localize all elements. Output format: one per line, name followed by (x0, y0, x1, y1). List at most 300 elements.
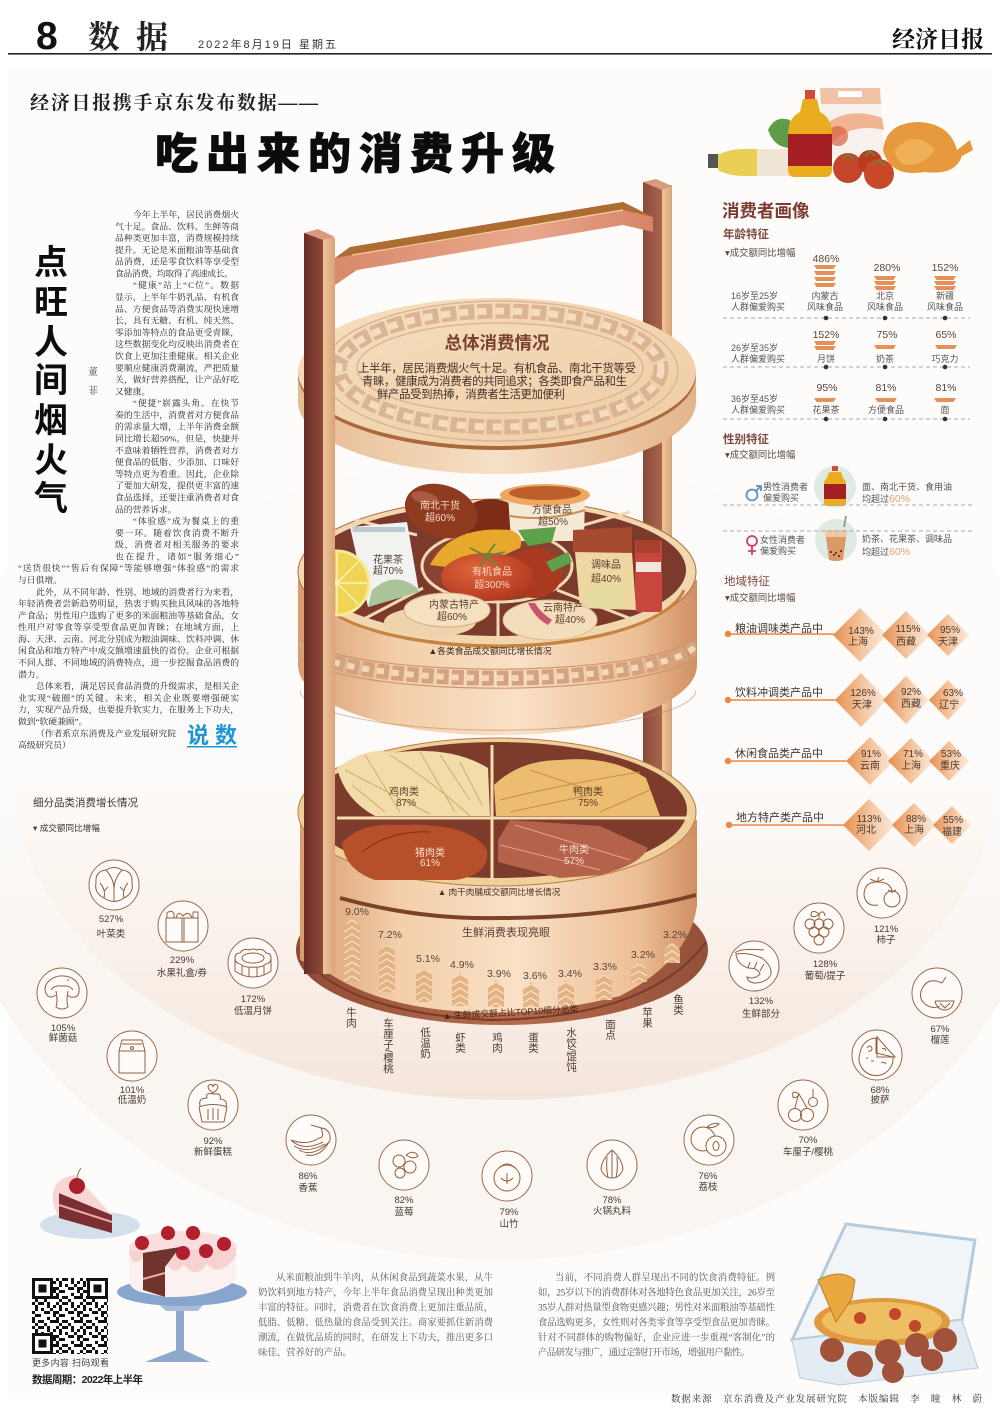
region row 2: 126% (850, 688, 876, 699)
article body text: 关，做好营养搭配，让产品好吃 (115, 374, 239, 386)
newspaper masthead (8, 15, 992, 58)
bottom text column 2: 如，25岁以下的消费群体对各地特色食品更加关注，26岁至 (538, 1286, 775, 1298)
age heading: 年龄特征 (723, 227, 769, 241)
label: leafy greens (97, 914, 126, 940)
label: mangosteen (499, 1207, 519, 1230)
middle tier food labels: 超60% (425, 511, 455, 524)
bar: shrimp 4.9% (452, 972, 468, 1006)
label: blueberry: 82% (394, 1195, 414, 1206)
label: mushroom (49, 1023, 77, 1044)
icon: cupcake (188, 1080, 238, 1130)
newspaper logo: 经济日报 (892, 27, 984, 52)
label: lychee (698, 1171, 718, 1193)
fresh food heading: 生鲜消费表现亮眼 (462, 925, 550, 939)
author byline: 董 (88, 366, 98, 378)
bar: fish 3.2% (664, 942, 680, 963)
left column vertical heading: 旺 (34, 284, 68, 322)
region row 4 (726, 799, 971, 851)
label: persimmon: 121% (874, 924, 899, 935)
region row 4: 河北 (856, 824, 876, 836)
region row 1: 粮油调味类产品中 (735, 621, 823, 635)
icon: mooncake (228, 938, 278, 988)
age row 1: 486% (813, 253, 839, 265)
vertical category labels under the bars: 鸡肉 (491, 1031, 503, 1053)
main title: 吃出来的消费升级 (155, 131, 555, 179)
left column vertical heading: 气 (34, 480, 68, 518)
food: dried goods (398, 475, 521, 547)
label: grapes: 葡萄/提子 (805, 970, 846, 982)
section name: 数据 (88, 19, 168, 55)
small oil bottle (708, 149, 790, 176)
region row 1: 115% (896, 624, 921, 635)
label: milk: 101% (120, 1085, 145, 1096)
region row 3: 53% (941, 749, 961, 760)
region row 3: 91% (861, 749, 881, 760)
age row 1: 风味食品 (867, 301, 903, 312)
food: flower tea and lemon (305, 522, 419, 615)
bar value labels: 3.2% (663, 929, 687, 941)
age row 2: 月饼 (817, 353, 835, 364)
masthead rule (8, 53, 992, 55)
male row (723, 466, 972, 508)
article body text: 业实现“破圈”的关键。未来，相关企业既要增强硬实 (18, 692, 239, 704)
article body text: 品种类更加丰富，消费规模持续 (115, 232, 239, 244)
article body text (18, 208, 239, 750)
label: durian (930, 1024, 950, 1046)
vertical category labels under the bars: 蛋类 (527, 1032, 539, 1054)
bar: eggs 3.6% (523, 982, 539, 1007)
bottom text column 1: 味佳、营养好的产品。 (258, 1346, 352, 1358)
gender legend: ▾成交额同比增幅 (725, 449, 795, 460)
icon: lychee (684, 1115, 734, 1165)
age row 3: 人群偏爱购买 (731, 404, 785, 415)
label: persimmon: 柿子 (876, 934, 896, 946)
region row 1: 143% (848, 626, 874, 637)
article body text: 食品消费，均取得了高速成长。 (115, 268, 233, 280)
middle tier rim (298, 499, 696, 646)
subcategory icon ring (37, 860, 962, 1230)
age row 3: 面 (940, 405, 950, 415)
bar value labels: 5.1% (416, 953, 440, 965)
label: fruit gift box (157, 955, 208, 979)
age row 2: 152% (813, 329, 839, 341)
region row 3: 重庆 (940, 759, 960, 772)
bottom tier food labels: 猪肉类 (415, 846, 445, 859)
lid text: 鲜产品受到热捧，消费者生活更加便利 (377, 387, 565, 401)
middle tier food labels: 超300% (474, 578, 510, 591)
bottom text column 1: 丰富的特征。同时，消费者在饮食消费上更加注重品质， (258, 1302, 493, 1314)
article body text: 便食品的低脂、少添加、口味好 (115, 456, 239, 467)
icon: persimmon (857, 868, 907, 918)
region row 2: 92% (901, 687, 921, 698)
pizza slice (818, 1274, 855, 1322)
region row 1: 天津 (938, 636, 958, 648)
left post (304, 229, 335, 974)
article body text: 要一环。随着饮食消费不断升 (115, 527, 239, 538)
middle tier food labels: 云南特产 (543, 601, 583, 614)
label: cherries: 70% (798, 1135, 818, 1146)
left column vertical heading: 间 (34, 362, 68, 400)
age row 3: 36岁至45岁 (731, 393, 778, 404)
bottom tier side with fresh food bars (300, 820, 697, 1013)
bar: beef 9.0% (344, 918, 360, 982)
article body text: 显示，上半年牛奶乳品、有机食 (115, 291, 239, 303)
bar: dumplings 3.4% (558, 980, 574, 1005)
label: hotpot balls: 78% (602, 1195, 622, 1206)
bottom tier food labels: 牛肉类 (559, 843, 589, 856)
illustration: cherry cake on stand (117, 1226, 247, 1362)
lid text: 上半年，居民消费烟火气十足。有机食品、南北干货等受 (358, 361, 636, 375)
age row 3: 95% (816, 382, 838, 394)
bar: cherries 7.2% (379, 943, 395, 992)
label: grapes: 128% (813, 959, 838, 970)
icon: banana (286, 1115, 336, 1165)
region row 3: 休闲食品类产品中 (735, 746, 823, 760)
article body text: 性用户对零食等享受型食品更加青睐；在地域方面，上 (18, 621, 239, 633)
article body text: 今年上半年，居民消费烟火 (133, 208, 239, 220)
bar value labels: 3.9% (487, 968, 511, 980)
bottom text column 1: 奶饮料到地方特产，今年上半年食品消费呈现出种类更加 (258, 1286, 493, 1298)
region row 1: 95% (940, 625, 960, 636)
article body text: 奏的生活中，消费者对方便食品 (115, 409, 239, 421)
region row 2: 63% (943, 688, 963, 699)
left column vertical heading (34, 244, 68, 518)
age row 3: 81% (875, 382, 897, 394)
top lid (298, 298, 696, 474)
left column vertical heading: 点 (34, 244, 68, 282)
label: shrimp: 生鲜部分 (742, 1008, 780, 1020)
article body text: （作者系京东消费及产业发展研究院 (36, 727, 176, 738)
vertical category labels under the bars: 低温奶 (419, 1026, 431, 1059)
vertical category labels under the bars: 牛肉 (345, 1006, 357, 1028)
article body text: 此外，从不同年龄、性别、地域的消费者行为来看， (36, 586, 239, 598)
article body text: 饮食上更加注重健康。相关企业 (115, 350, 239, 361)
caption: food categories: ▲各类食品成交额同比增长情况 (428, 645, 552, 656)
shuoshu label: 说数 (187, 723, 237, 748)
age row 1: 16岁至25岁 (731, 290, 778, 301)
label: cherries: 车厘子/樱桃 (783, 1146, 834, 1158)
label: milk (118, 1085, 146, 1106)
label: lychee: 76% (698, 1171, 718, 1182)
label: mooncake (234, 994, 272, 1017)
label: shrimp: 132% (749, 996, 774, 1007)
icon: pizza (852, 1030, 902, 1080)
article body text: “体验感”成为餐桌上的重 (133, 515, 239, 526)
bottom text column 2: 产品研发与推广，通过定制打开市场，增强用户黏性。 (538, 1346, 750, 1358)
label: cherries (783, 1135, 834, 1158)
illustration: cake slice (40, 1168, 140, 1239)
box lid (792, 1224, 975, 1340)
illustration: pizza box and meatballs (792, 1224, 978, 1385)
subcategory legend: ▾ 成交额同比增幅 (33, 822, 100, 833)
article body text: 气十足。食品、饮料、生鲜等商 (115, 220, 239, 231)
date: 2022年8月19日 星期五 (198, 37, 336, 51)
label: mushroom: 105% (51, 1023, 76, 1034)
region row 1: 上海 (848, 635, 868, 648)
author byline: 菲 (88, 385, 98, 397)
icon: mushroom (37, 968, 87, 1018)
data period: 数据周期：2022年上半年 (32, 1373, 144, 1386)
icon: milk carton (107, 1031, 157, 1081)
label: mooncake: 172% (241, 994, 266, 1005)
caption: jerky: ▲ 肉干肉脯成交额同比增长情况 (438, 886, 561, 897)
vertical category labels under the bars: 车厘子/樱桃 (382, 1017, 394, 1074)
bottom text column 1: 从米面粮油到牛羊肉，从休闲食品到蔬菜水果，从牛 (276, 1272, 493, 1284)
age legend: ▾成交额同比增幅 (725, 247, 795, 258)
label: blueberry (394, 1195, 414, 1218)
region legend: ▾成交额同比增幅 (725, 592, 795, 603)
male row: 男性消费者 (763, 481, 808, 492)
article body text: 品消费，还是零食饮料等享受型 (115, 256, 239, 268)
label: cake: 新鲜蛋糕 (194, 1146, 232, 1158)
female row: 偏爱购买 (760, 545, 796, 556)
bar: chicken 3.9% (488, 980, 504, 1007)
male row: 均超过60% (862, 493, 910, 505)
article body text: 海、天津、云南、河北分别成为粮油调味、饮料冲调、休 (18, 633, 239, 644)
food: Yunnan specialty (503, 600, 597, 640)
bottom text column 1: 低脂、低糖、低热量的食品受到关注。商家要抓住新消费 (258, 1316, 494, 1328)
label: mangosteen: 山竹 (499, 1218, 519, 1230)
vertical category labels under the bars: 鱼类 (672, 993, 684, 1016)
middle tier side (296, 580, 698, 735)
age row 1 (723, 253, 970, 320)
region row 2 (725, 673, 967, 727)
region row 2: 饮料冲调类产品中 (735, 685, 823, 699)
article body text: 闲食品和地方特产中成交额增速最快的省份。企业可根据 (18, 645, 239, 656)
icon: cherries (778, 1080, 828, 1130)
article body text: “送货很快”“售后有保障”等能够增强“体验感”的需求 (18, 562, 239, 573)
food: seasoning jar and bottle (573, 527, 662, 612)
label: banana (298, 1171, 318, 1194)
region row 4: 113% (857, 814, 882, 825)
bar value labels (345, 906, 687, 982)
page number: 8 (36, 15, 58, 58)
region row 3: 上海 (901, 759, 921, 772)
region row 2: 天津 (852, 699, 872, 711)
chicken jerky (337, 751, 490, 816)
age row 3 (723, 382, 970, 421)
article body text: 高级研究员） (18, 739, 71, 750)
region row 3: 71% (903, 749, 923, 760)
article body text: 总体来看，满足居民食品消费的升级需求，是相关企 (36, 680, 239, 692)
left column vertical heading: 火 (34, 442, 68, 480)
label: shrimp (742, 996, 780, 1020)
left column vertical heading: 烟 (34, 402, 68, 440)
middle tier food labels: 超50% (538, 515, 568, 528)
right post (643, 179, 672, 962)
bottom tier food labels: 57% (564, 856, 584, 867)
icon: grapes (794, 903, 844, 953)
article body text: 又健康。 (115, 385, 150, 396)
rice bag (820, 88, 884, 158)
article body text: 级，消费者对相关服务的要求 (115, 539, 239, 551)
food: organic vegetables (430, 529, 572, 601)
vertical category labels under the bars (345, 993, 684, 1074)
age row 3: 花果茶 (812, 404, 840, 415)
bottom tier food labels (389, 785, 603, 869)
lid text: 青睐，健康成为消费者的共同追求；各类即食产品和生 (362, 374, 627, 388)
label: persimmon (874, 924, 899, 946)
article body text: “健康”站上“C位”。数据 (133, 279, 239, 290)
food: instant cup (500, 484, 590, 546)
middle tier food labels: 超70% (373, 564, 403, 577)
bottom tier meats (337, 751, 660, 880)
tomatoes (833, 150, 894, 189)
article body text: 的需求量大增，上半年消费金额 (115, 421, 239, 433)
bottom tier food labels: 75% (578, 798, 598, 809)
footer credits: 数据来源 京东消费及产业发展研究院 本版编辑 李 瞳 林 蔚 (671, 1393, 982, 1405)
middle tier food labels: 有机食品 (472, 565, 512, 578)
gender heading: 性别特征 (723, 432, 769, 446)
region row 1: 西藏 (896, 636, 916, 648)
middle tier food labels (373, 499, 621, 626)
steamer illustration (296, 179, 708, 1025)
article body text: 品、方便食品等消费实现快速增 (115, 303, 239, 314)
portrait heading: 消费者画像 (722, 201, 810, 221)
region row 4: 55% (943, 815, 963, 826)
age row 2: 人群偏爱购买 (731, 353, 785, 364)
icon: mangosteen (482, 1151, 532, 1201)
female row: 女性消费者 (760, 534, 805, 545)
label: fruit gift box: 水果礼盒/券 (157, 967, 208, 979)
food: Inner Mongolia specialty (384, 593, 490, 637)
bottom text column 2: 35岁人群对热量型食物更感兴趣；男性对米面粮油等基础性 (538, 1302, 776, 1314)
bar: apple 3.2% (631, 962, 647, 982)
label: fruit gift box: 229% (170, 955, 195, 966)
meatballs (820, 1328, 957, 1383)
article body text: 这些数据变化均反映出消费者在 (115, 338, 239, 349)
region row 3: 云南 (860, 759, 880, 772)
region row 4: 88% (906, 814, 926, 825)
bottom tier rim (298, 738, 696, 886)
middle tier food labels: 花果茶 (373, 553, 403, 566)
article body text: “便捷”崭露头角。在快节 (133, 397, 239, 408)
article body text: 提升。无论是米面粮油等基础食 (115, 244, 239, 255)
bar value labels: 7.2% (378, 929, 402, 941)
label: durian: 榴莲 (930, 1034, 950, 1046)
label: cake: 92% (203, 1136, 223, 1147)
article body text: 不意味着牺牲营养，消费者对方 (115, 444, 239, 456)
article body text: 年轻消费者尝新趋势明显，热衷于购买独具风味的各地特 (18, 598, 239, 610)
age row 1: 152% (932, 262, 958, 274)
label: leafy greens: 527% (99, 914, 124, 925)
region row 3 (725, 737, 969, 785)
age row 1: 内蒙古 (811, 290, 839, 301)
age row 2: 75% (876, 329, 898, 341)
region row 2: 辽宁 (939, 698, 959, 711)
label: pizza (870, 1085, 890, 1106)
QR caption: 更多内容 扫码观看 (32, 1357, 109, 1368)
bar: pastry 3.3% (596, 973, 612, 1000)
base tray (296, 875, 708, 1025)
article body text: 等特点更为看重。因此，企业除 (115, 468, 239, 480)
author byline (88, 366, 98, 397)
article body text: 长，具有无糖、有机、纯天然、 (115, 315, 239, 327)
top handle (335, 202, 653, 285)
QR code (32, 1278, 108, 1354)
bottom text column 2 (538, 1272, 776, 1358)
middle tier food labels: 方便食品 (532, 503, 572, 516)
region row 4: 上海 (904, 823, 924, 836)
subcategory heading: 细分品类消费增长情况 (33, 796, 138, 809)
age row 3: 81% (935, 382, 957, 394)
label: pizza: 披萨 (870, 1094, 890, 1106)
article body text: 力，实现产品升级，也要提升软实力，在服务上下功夫， (18, 704, 239, 716)
panel: consumer portrait (722, 201, 972, 851)
label: leafy greens: 叶菜类 (97, 928, 126, 940)
caption: fresh top10: ▲ 生鲜成交额占比TOP10细分品类 (443, 1003, 579, 1021)
age row 1: 风味食品 (807, 301, 843, 312)
label: grapes (805, 959, 846, 982)
icon: shrimp (729, 941, 779, 991)
region row 1 (725, 608, 969, 662)
age row 1: 人群偏爱购买 (731, 301, 785, 312)
label: mushroom: 鲜菌菇 (49, 1032, 77, 1044)
lid heading: 总体消费情况 (444, 333, 550, 353)
icon: hotpot balls (587, 1140, 637, 1190)
left column vertical heading: 人 (34, 324, 68, 362)
label: mangosteen: 79% (499, 1207, 519, 1218)
bottom tier food labels: 87% (396, 798, 416, 809)
lid text (358, 361, 636, 401)
male row: 偏爱购买 (763, 492, 799, 503)
label: banana: 86% (298, 1171, 318, 1182)
label: hotpot balls: 火锅丸料 (593, 1205, 631, 1217)
article body text: 也在提升，诸如“服务细心” (115, 550, 239, 562)
middle tier food labels: 南北干货 (420, 499, 460, 512)
label: cake (194, 1136, 232, 1158)
age row 1: 新疆 (936, 290, 954, 301)
subtitle: 经济日报携手京东发布数据—— (30, 91, 319, 114)
box base (792, 1320, 978, 1385)
vertical category labels under the bars: 水饺/馄饨 (565, 1027, 577, 1072)
bar value labels: 3.6% (523, 970, 547, 982)
icon: blueberry (379, 1140, 429, 1190)
article body text: 零添加等特点的食品更受青睐， (115, 326, 239, 338)
middle tier food labels: 超40% (591, 572, 621, 585)
label: banana: 香蕉 (298, 1182, 318, 1194)
green vegetables (768, 119, 795, 148)
big oil bottle (788, 90, 832, 177)
article body text: 同比增长超50%。但是，快捷并 (115, 432, 239, 444)
bottom tier food labels: 61% (420, 858, 440, 869)
article body text: 产食品；男性用户选购了更多的米面粮油等基础食品，女 (18, 609, 239, 621)
vertical category labels under the bars: 虾类 (454, 1031, 466, 1054)
bar: milk 5.1% (416, 967, 432, 1002)
outer arc background (0, 320, 1000, 1260)
article body text: 了要加大研发，提供更丰富的速 (115, 480, 239, 492)
bar value labels: 3.4% (558, 968, 582, 980)
middle tier food labels: 超40% (555, 613, 585, 626)
age row 2: 巧克力 (931, 353, 959, 364)
bottom tier dividers (337, 745, 690, 880)
bottom text column 2: 针对不同群体的购物偏好，企业应进一步重视“客制化”的 (538, 1332, 775, 1344)
region row 4: 地方特产类产品中 (736, 810, 824, 824)
roast chicken (883, 122, 973, 173)
pork jerky (342, 825, 487, 880)
middle tier food labels: 调味品 (591, 559, 621, 571)
bottom tier food labels: 鸭肉类 (573, 785, 603, 798)
article body text: 要顺应健康消费潮流，严把质量 (115, 362, 239, 374)
label: hotpot balls (593, 1195, 631, 1217)
article body text: 做到“软硬兼顾”。 (18, 716, 87, 726)
label: durian: 67% (930, 1024, 950, 1035)
bar value labels: 9.0% (345, 906, 369, 918)
age row 1: 280% (874, 262, 900, 274)
label: mooncake: 低温月饼 (234, 1005, 272, 1017)
bar value labels: 3.3% (593, 961, 617, 973)
bottom text column 2: 当前，不同消费人群呈现出不同的饮食消费特征。例 (555, 1272, 775, 1284)
